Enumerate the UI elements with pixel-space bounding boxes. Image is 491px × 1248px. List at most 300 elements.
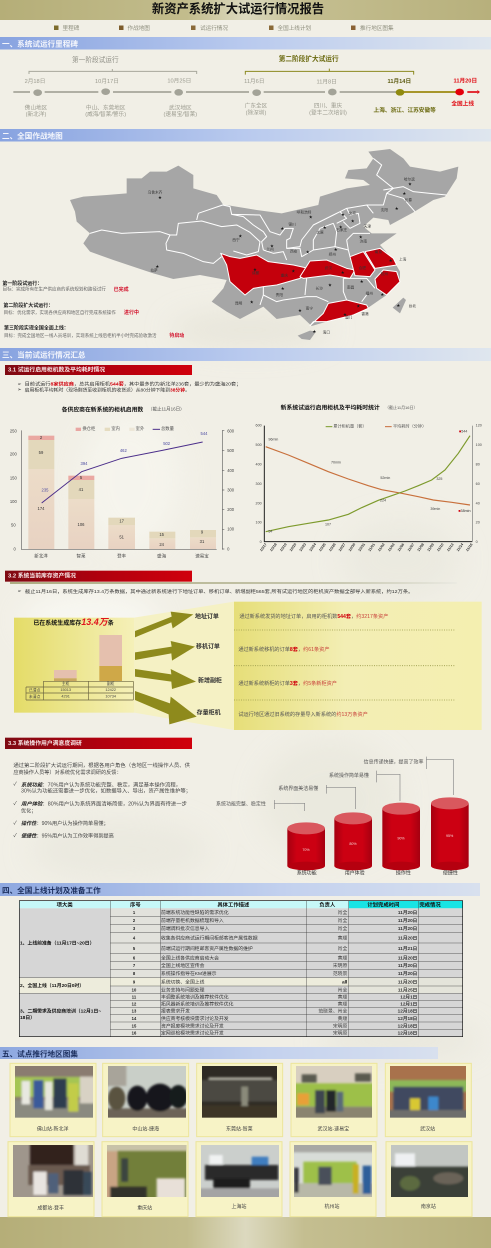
survey text: ✓ <box>13 833 17 839</box>
sequence numbers: 13 <box>132 1009 137 1014</box>
subheading 3.2 bar: 3.2 系统当前库存资产情况 <box>8 572 76 580</box>
photo: Wuhan <box>385 1063 471 1137</box>
task descriptions: 前端调料批次信息导入 <box>161 925 209 932</box>
row dividers <box>234 630 455 700</box>
row descriptions: 通过新系统新柜的订单3套，约5条新柜资产 <box>238 679 337 687</box>
data labels: 325 <box>436 477 442 481</box>
inventory note: ➢ <box>17 590 21 595</box>
subheading 3.1 bar: 3.1 试运行启用柜机数及平均耗时情况 <box>8 366 105 374</box>
task descriptions: 前端系统功能性缺陷的需求优化 <box>161 909 229 916</box>
owners: 黄顺 <box>338 954 347 961</box>
title: 新资产系统扩大试运行情况报告 <box>152 1 324 16</box>
sequence numbers: 6 <box>133 955 136 960</box>
row descriptions: 通过新系统发货的地址订单，启用的柜机数544套，约3217条资产 <box>239 612 388 620</box>
date axis labels: 10/23 <box>299 542 307 552</box>
callout leaders <box>274 757 453 811</box>
callout texts: 系统操作简单易懂 <box>329 772 369 779</box>
map: city stars: ★ <box>334 247 338 252</box>
map: city stars: ★ <box>408 181 412 186</box>
left axis labels: 100 <box>10 499 17 504</box>
section heading 1: 一、系统试运行里程碑 <box>2 38 78 48</box>
category cells <box>20 939 101 1021</box>
map: city labels: 北京 <box>349 211 356 216</box>
right axis <box>471 426 473 542</box>
bar chart: cabinets by supplier <box>10 406 235 560</box>
date axis labels: 10/18 <box>269 542 278 552</box>
category cells: 18日） <box>20 1015 35 1021</box>
data labels: 107 <box>325 523 331 527</box>
data labels: 52min <box>380 476 390 480</box>
navigation row: 全国上线计划 <box>278 24 311 32</box>
row descriptions: 试运行地区通过旧系统的存量导入新系统的约13万条资产 <box>238 710 368 718</box>
data labels: 462 <box>120 448 127 453</box>
phase three note: 第三阶段实现全国全面上线： <box>4 325 69 332</box>
milestone dates: 11月14日 <box>388 78 411 85</box>
task descriptions: 前端存量柜机数据梳理和导入 <box>161 917 224 924</box>
phase one note: 第一阶段试运行： <box>2 280 42 287</box>
cylinder axis labels: 用户体验 <box>345 869 365 876</box>
due dates: 11月20日 <box>398 955 417 961</box>
left axis labels <box>256 424 262 544</box>
map: city labels: 石家庄 <box>336 227 347 232</box>
data labels <box>38 431 208 547</box>
milestone locations: (威海/智莱/警乐) <box>85 110 126 118</box>
panel: inventory total <box>14 617 134 713</box>
survey text: 应商操作人员等）对系统优化需求调研的反馈： <box>13 768 122 776</box>
chart legend <box>326 423 426 429</box>
map: city stars: ★ <box>309 214 313 219</box>
owners: 黄顺 <box>338 934 347 941</box>
phase two note: 目标：优化需求，实现各供应商和地区自行完成系统操作 <box>4 309 116 316</box>
left axis labels: 0 <box>14 546 17 551</box>
map: city stars: ★ <box>389 258 393 263</box>
map: city stars: ★ <box>351 218 355 223</box>
photo: Shanghai <box>196 1142 282 1217</box>
date axis labels: 11/10 <box>436 543 445 552</box>
map: city labels: 澳门 <box>345 314 353 319</box>
map: city labels: 西安 <box>290 249 298 254</box>
photo: Chongqing: 重庆站 <box>137 1205 152 1212</box>
date axis labels: 11/13 <box>446 543 455 552</box>
task descriptions: 全国上线各供应商启动大会 <box>161 954 219 961</box>
subsection 3.1 <box>5 365 241 393</box>
table header: 序号 <box>130 900 141 908</box>
inventory headline: 已在系统生成库存13.4万条 <box>33 617 114 627</box>
map: city labels: 沈阳 <box>381 207 388 212</box>
date axis labels: 10/25 <box>318 542 327 552</box>
left axis labels: 0 <box>260 540 262 544</box>
phase one note <box>2 280 129 293</box>
owners: 黄顺 <box>338 1015 347 1022</box>
task descriptions: 收集各供应商试运行期间柜邮客资产属性数据 <box>161 934 258 941</box>
map: city stars: ★ <box>339 224 343 229</box>
task descriptions <box>161 909 258 1036</box>
task descriptions: 前端试运行期间柜邮客资产属性数据的维护 <box>161 945 253 952</box>
owners: 黄顺 <box>338 993 347 1000</box>
data labels: 224 <box>380 499 386 503</box>
cylinder axis labels: 操作性 <box>396 869 411 876</box>
data labels: 54 <box>268 529 272 533</box>
date axis labels: 10/17 <box>259 542 268 552</box>
data table <box>26 681 133 700</box>
photo gallery <box>8 1063 472 1217</box>
photo: Chongqing <box>102 1142 190 1217</box>
data labels: 174 <box>38 506 45 511</box>
navigation row: 推行地区图集 <box>360 24 394 32</box>
section heading 5: 五、试点推行地区图集 <box>2 1048 78 1058</box>
data labels: 17 <box>119 519 125 524</box>
plan table <box>19 900 463 1037</box>
subheading 3.3 bar: 3.3 系统操作用户满意度调研 <box>8 739 82 747</box>
timeline arrow <box>467 89 477 94</box>
navigation row: 作战地图 <box>128 24 150 32</box>
milestone timeline <box>13 54 480 118</box>
due dates: 12月1日 <box>400 994 417 1000</box>
data labels <box>268 430 471 533</box>
chart bars <box>28 436 216 549</box>
data labels: 15 <box>159 532 165 537</box>
milestone dates: 2月18日 <box>25 78 45 85</box>
date axis labels: 11/06 <box>397 543 405 552</box>
bullet notes: 启用柜机平均耗时（现场剩货至收到柜机的收货派）从80分钟下降到38分钟。 <box>25 386 190 393</box>
map: city labels: 南京 <box>375 249 382 254</box>
owners <box>318 909 347 1036</box>
row descriptions: 通过新系统移机的订单8套，约61条资产 <box>238 645 329 653</box>
left axis labels: 200 <box>256 501 262 505</box>
map: city labels: 福州 <box>366 291 373 296</box>
cylinder: system function <box>287 822 325 870</box>
section heading 2 <box>0 129 491 142</box>
left axis labels: 600 <box>256 424 262 428</box>
milestone locations: 广东全区 <box>245 102 268 110</box>
chart title: （截止11月16日） <box>385 404 417 410</box>
sequence numbers: 7 <box>133 963 136 968</box>
chart axes <box>22 430 224 550</box>
due dates <box>398 910 417 1036</box>
map: city stars: ★ <box>403 191 407 196</box>
phase legend text <box>2 280 184 339</box>
right axis labels: 500 <box>227 448 235 453</box>
task descriptions: 系统切换、全国上线 <box>161 978 205 985</box>
milestone dates <box>25 77 477 86</box>
map: city labels: 南昌 <box>347 285 355 290</box>
map: city labels: 呼和浩特 <box>297 210 312 215</box>
due dates: 11月20日 <box>398 979 417 985</box>
map: city stars: ★ <box>281 286 285 291</box>
owners: 宋明原 <box>333 962 347 969</box>
data labels: 5 <box>80 475 83 480</box>
map: city stars: ★ <box>313 328 317 333</box>
cylinder: operability: 90% <box>397 837 405 841</box>
map: city stars: ★ <box>395 206 399 211</box>
data table: 12422 <box>105 688 116 692</box>
left axis labels: 500 <box>256 443 262 447</box>
data labels: 544 <box>201 431 208 436</box>
china map <box>70 149 458 340</box>
milestone nodes <box>30 88 480 96</box>
right axis labels: 400 <box>227 468 235 473</box>
due dates: 11月20日 <box>398 926 417 932</box>
table body shading <box>19 908 463 1037</box>
due dates: 11月20日 <box>398 918 417 924</box>
cylinder axis labels: 便捷性 <box>443 869 458 876</box>
chart title: 新系统试运行启用柜机及平均耗时统计 <box>281 403 380 411</box>
orange series: average time <box>266 447 470 505</box>
row descriptions <box>238 612 388 718</box>
chart legend <box>76 425 175 432</box>
right axis labels: 0 <box>476 540 478 544</box>
cylinder: operability <box>382 803 420 870</box>
map: city labels: 天津 <box>364 223 371 228</box>
date axis labels: 11/16 <box>465 543 474 552</box>
inventory note: 截止11月16日，系统生成库存13.4万条数据，其中通过新系统进行下地址订单、移机订单、新增副柜565套,所有试运行地区的柜机资产数据全部导入新系统，约12万条。 <box>25 588 413 595</box>
data table: 未清点 <box>29 694 41 699</box>
map: city stars: ★ <box>341 270 345 275</box>
task descriptions: 业务支持与问题处理 <box>161 986 205 993</box>
bullet notes: ➢ <box>17 382 21 387</box>
owners: all <box>342 979 347 985</box>
milestone locations: 全国上线 <box>451 100 474 108</box>
task descriptions: 丰调整系统培训及推荐软件优化 <box>161 993 229 1000</box>
right axis labels: 120 <box>476 424 482 428</box>
map: province borders <box>90 158 447 305</box>
inventory note <box>17 588 413 595</box>
photo: Dongguan <box>197 1063 283 1137</box>
left axis labels: 150 <box>10 476 17 481</box>
owners: 宋明原 <box>333 1029 347 1036</box>
sequence numbers: 3 <box>133 926 136 931</box>
right axis labels: 600 <box>227 428 235 433</box>
milestone dates: 11月8日 <box>316 79 337 86</box>
milestone locations: (登丰二次培训) <box>309 109 347 117</box>
arrow labels: 新增副柜 <box>198 676 222 684</box>
sequence numbers: 10 <box>132 987 137 992</box>
map: city labels: 南宁 <box>306 306 313 311</box>
map: city labels: 上海 <box>399 257 407 262</box>
left axis labels <box>10 428 17 551</box>
table outline <box>19 901 463 1037</box>
map: city labels: 台北 <box>409 303 416 308</box>
map: city stars: ★ <box>158 195 162 200</box>
milestone locations: 佛山地区 <box>25 103 48 111</box>
data labels: ■544 <box>459 430 467 434</box>
data labels: 24 <box>159 542 165 547</box>
date axis labels: 10/30 <box>348 542 356 552</box>
map: city stars: ★ <box>359 234 363 239</box>
due dates: 12月1日 <box>400 1001 417 1007</box>
category labels: 登丰 <box>117 553 127 560</box>
date axis labels: 11/09 <box>427 543 435 552</box>
cylinder: user experience <box>334 812 372 870</box>
table header: 具体工作描述 <box>217 900 250 908</box>
header band <box>0 0 491 20</box>
data labels: 31 <box>200 539 205 544</box>
milestone locations: (新北洋) <box>26 110 46 118</box>
arrow labels: 移机订单 <box>196 642 220 650</box>
milestone locations: 武汉地区 <box>169 103 192 111</box>
map: city stars: ★ <box>357 303 361 308</box>
map: city stars: ★ <box>270 243 274 248</box>
phase three note <box>4 325 184 339</box>
map: city stars: ★ <box>323 225 327 230</box>
data labels: 96min <box>268 438 278 442</box>
phase two bracket <box>245 69 414 75</box>
section heading 4: 四、全国上线计划及准备工作 <box>2 885 101 895</box>
map: city stars: ★ <box>298 308 302 313</box>
map: city labels: 长沙 <box>316 285 323 290</box>
chart legend: 换仓柜 <box>82 425 96 432</box>
due dates: 11月25日 <box>398 987 417 993</box>
due dates: 11月21日 <box>398 946 417 952</box>
map: city stars: ★ <box>156 264 160 269</box>
section heading 3: 三、当前试运行情况汇总 <box>2 350 86 360</box>
due dates: 12月18日 <box>398 1009 417 1015</box>
arrow labels: 存量柜机 <box>197 708 221 716</box>
map: city labels: 长春 <box>405 197 412 202</box>
map: city labels: 郑州 <box>329 251 336 256</box>
map: city labels: 合肥 <box>359 265 366 270</box>
owners: 范晓景 <box>333 970 347 977</box>
date axis labels: 10/31 <box>358 542 366 552</box>
footer band <box>0 1217 491 1248</box>
left axis labels: 200 <box>10 452 17 457</box>
subheading 3.2 bar <box>5 571 192 582</box>
timeline progress <box>400 89 458 94</box>
right axis labels: 60 <box>476 482 480 486</box>
category cells: 1、上线前准备（11月17日~20日） <box>20 939 94 946</box>
cylinder axis labels: 系统功能 <box>297 869 317 876</box>
cylinder: convenience: 95% <box>446 834 454 838</box>
map: city labels: 拉萨 <box>150 267 158 272</box>
milestone locations: (除深圳) <box>246 108 266 116</box>
map: city labels: 武汉 <box>325 265 332 270</box>
data labels: 41 <box>79 487 84 492</box>
map: city labels: 昆明 <box>235 301 243 306</box>
date axis labels: 11/07 <box>407 543 415 552</box>
category cells: 2、全国上线（11月20日0时） <box>20 982 84 989</box>
left axis labels: 50 <box>11 523 16 528</box>
phase three note: 待启动 <box>169 332 184 339</box>
data table: 10734 <box>105 695 117 699</box>
owners: 宋明原 <box>333 1022 347 1029</box>
section heading 3 <box>0 348 491 361</box>
photo: Shanghai: 上海站 <box>232 1203 246 1210</box>
callout texts: 系统功能完整、稳定性 <box>216 800 266 807</box>
subheading 3.1 bar <box>5 365 192 375</box>
milestone dates: 11月6日 <box>244 78 265 85</box>
map: city labels: 海口 <box>323 330 330 335</box>
arrow labels: 地址订单 <box>195 612 219 620</box>
chart title: 各供应商在新系统的柜机启用数 <box>62 406 143 414</box>
photo: Wuhan Sposter: 武汉站-速易宝 <box>318 1126 349 1133</box>
map: city stars: ★ <box>250 299 254 304</box>
due dates: 11月20日 <box>398 935 417 941</box>
survey text: ✓ <box>13 820 17 826</box>
stacked bars <box>54 635 122 681</box>
photo: Zhongshan <box>103 1063 189 1137</box>
milestone locations: 四川、重庆 <box>314 102 342 110</box>
bullet notes <box>17 381 241 393</box>
owners: 肖全 <box>338 986 347 993</box>
category labels: 速易宝 <box>195 553 209 560</box>
map: base country shape <box>70 149 458 326</box>
photo: Dongguan: 东莞站-智莱 <box>226 1126 253 1133</box>
milestone dates: 10月17日 <box>95 78 119 85</box>
map: city stars: ★ <box>381 292 385 297</box>
sequence numbers: 15 <box>132 1023 137 1028</box>
timeline track <box>13 89 397 94</box>
navigation row: 试运行情况 <box>200 24 228 32</box>
map: city stars: ★ <box>281 226 285 231</box>
milestone locations: 中山、东莞地区 <box>86 103 126 111</box>
map: city stars: ★ <box>292 268 296 273</box>
chart legend: 室内 <box>111 425 120 432</box>
photo: Zhongshan: 中山站-捷海 <box>132 1126 159 1133</box>
map: highlighted trial provinces <box>221 248 400 326</box>
survey text: 通过第二阶段扩大试运行期间，根据各用户角色（含地区一线操作人员、供 <box>13 761 190 769</box>
task descriptions: 系统操作指导在KM进展示 <box>161 970 217 977</box>
date axis labels: 10/27 <box>338 542 346 552</box>
survey text: 用户体验：80%用户认为系统界面清晰简便，20%认为界面有待进一步 <box>21 800 187 808</box>
map: city labels: 杭州 <box>381 271 388 276</box>
phase two note: 进行中 <box>124 309 139 316</box>
due dates: 11月20日 <box>398 971 417 977</box>
phase three note: 目标：完成全国地区一线人员培训，实现系统上线后柜机半小时完成验收激活 <box>4 332 157 339</box>
phase one bracket <box>29 69 197 74</box>
survey text <box>13 761 191 840</box>
date axis labels: 10/24 <box>309 542 318 552</box>
survey text: 便捷性：95%用户认为工作效率得到提高 <box>21 832 114 840</box>
green series: cabinets <box>266 436 470 532</box>
sequence numbers: 5 <box>133 946 136 951</box>
chart axes <box>264 426 472 542</box>
table grid <box>19 901 463 1037</box>
photo: Nanjing <box>386 1142 472 1217</box>
section heading 2: 二、全国作战地图 <box>2 130 63 140</box>
chart legend: 累计柜机量（套） <box>333 423 367 429</box>
data labels: 59 <box>39 450 44 455</box>
task descriptions: 报表需求开发 <box>161 1008 190 1015</box>
phase one note: 已完成 <box>114 286 129 293</box>
data table: 已清点 <box>29 687 41 692</box>
cylinder: convenience <box>431 797 469 870</box>
sequence numbers: 9 <box>133 979 136 984</box>
date axis labels: 10/20 <box>289 542 297 552</box>
date axis labels: 11/08 <box>417 543 425 552</box>
category labels <box>34 553 209 560</box>
task descriptions: 定网巡检模块需求讨论及开发 <box>161 1029 224 1036</box>
photo: Foshan <box>10 1063 96 1137</box>
right axis labels: 80 <box>476 462 480 466</box>
date axis labels: 10/26 <box>328 542 337 552</box>
survey text: 系统功能：70%用户认为系统功能完整、稳定，满足基本操作流程， <box>21 780 181 788</box>
date axis labels: 11/14 <box>456 542 465 552</box>
map: city stars: ★ <box>360 278 364 283</box>
survey text: ✓ <box>13 782 17 788</box>
milestone locations: (速易宝/智莱) <box>164 110 197 118</box>
phase two note <box>3 302 139 316</box>
photo: Chengdu <box>8 1142 94 1217</box>
right axis labels: 300 <box>227 487 235 492</box>
right axis labels: 40 <box>476 501 480 505</box>
sequence numbers: 8 <box>133 971 136 976</box>
map: islands <box>298 298 406 340</box>
phase two note: 第二阶段扩大试运行： <box>3 302 53 309</box>
date axis labels: 11/01 <box>368 543 376 552</box>
map: city labels: 贵阳 <box>276 292 283 297</box>
data table: 主柜 <box>62 681 70 686</box>
subheading 3.3 bar <box>5 738 192 749</box>
